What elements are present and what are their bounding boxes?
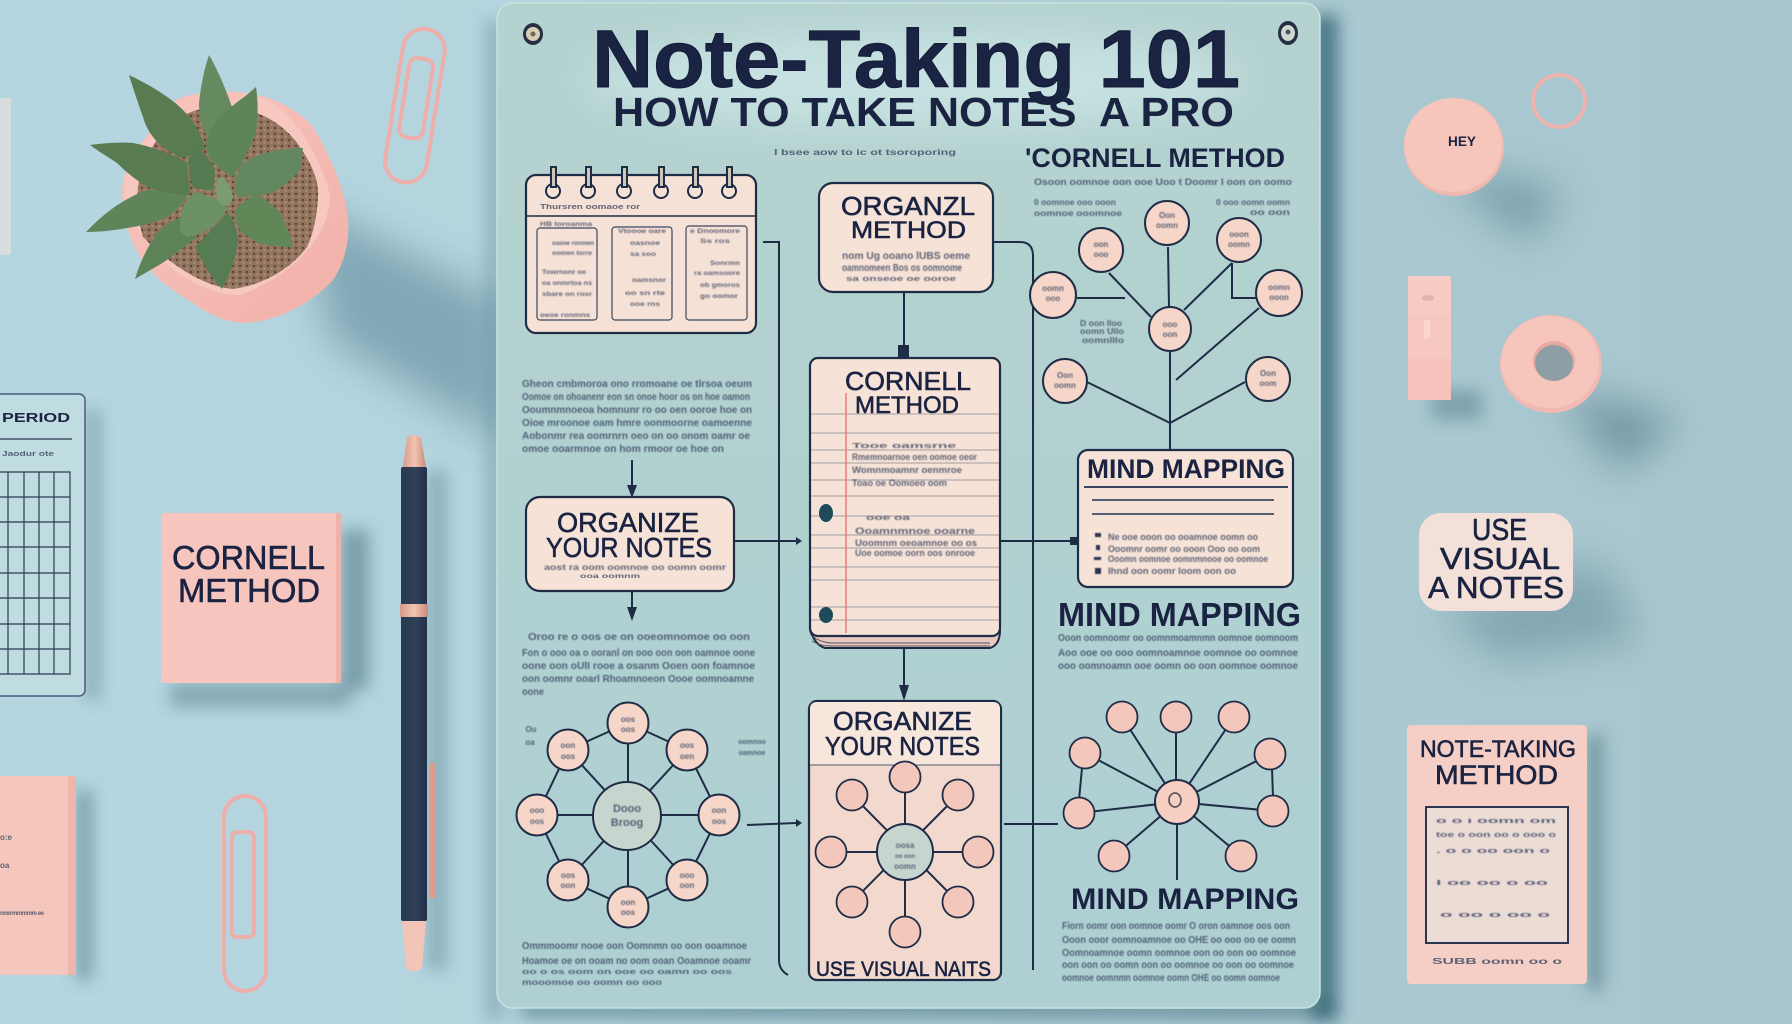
tree nodes xyxy=(1030,201,1302,403)
card text xyxy=(842,251,970,283)
left text block 2: oon oomnr ooarl Rhoamnoeon Oooe oomnoamne xyxy=(522,674,754,685)
left text block 2: Fon o ooo oa o ooranl on ooo oon oon oamnoe oone xyxy=(522,648,755,659)
hole top xyxy=(819,504,833,522)
pin left xyxy=(523,23,543,45)
notebook text: Rmemnoarnoe oen oomoe oeor xyxy=(852,452,977,462)
network labels xyxy=(525,715,766,917)
spiral rings xyxy=(546,167,736,198)
card text: nom Ug ooano lUBS oeme xyxy=(842,251,970,262)
card: Cornell Method notebook xyxy=(810,358,1000,648)
planner column text: oasnoe xyxy=(630,240,660,247)
faint caption: I bsee aow to ic ot tsoroporing xyxy=(774,148,956,157)
left text block 2: Oroo re o oos oe on ooeomnomoe oo oon xyxy=(528,632,750,643)
tag line 1: USE xyxy=(1472,512,1527,547)
card heading: MIND MAPPING xyxy=(1087,454,1285,484)
card bullets: Ihnd oon oomr Ioom oon oo xyxy=(1108,566,1237,576)
left text block 2: oone xyxy=(522,687,544,698)
network labels: oos xyxy=(712,817,727,826)
tree labels: oon xyxy=(1094,240,1108,249)
notebook text: ooe oa xyxy=(866,515,910,522)
tree side notes: oomnlllo xyxy=(1082,336,1124,345)
text under lower heading: Ooon ooor oomnoamnoe oo OHE oo ooo oo oe oomn xyxy=(1062,935,1296,946)
inner text: . o o oo oon o xyxy=(1436,848,1550,855)
planner column text: sbare on rosr xyxy=(542,291,593,298)
text under Cornell heading: Osoon oomnoe oon ooe Uoo t Doomr I oon on oomo xyxy=(1034,177,1293,187)
tree labels xyxy=(1042,211,1290,390)
notebook text: Womnmoamnr oenmroe xyxy=(852,465,962,475)
tree center xyxy=(1149,307,1191,351)
network labels: oos xyxy=(530,817,545,826)
network labels: oa xyxy=(525,738,535,747)
network labels: Dooo xyxy=(613,803,641,815)
planner column text: oa onmrtoa ns xyxy=(542,280,592,287)
inner frame xyxy=(1426,807,1568,943)
network labels: oon xyxy=(561,881,575,890)
heading: Mind Mapping: MIND MAPPING xyxy=(1058,596,1301,633)
inner text: toe o oon oo o ooo o xyxy=(1436,832,1556,839)
text under lower heading: oomnoe oomnmn oomnoe oomn OHE oo oomn oomnoe xyxy=(1062,973,1280,984)
tree labels: Oon xyxy=(1057,371,1073,380)
network labels: oos xyxy=(561,871,576,880)
card footer: SUBB oomn oo o xyxy=(1432,957,1562,966)
tag: Use Visual A Notes xyxy=(1419,512,1573,611)
notebook text: Uoomnm oeoamnoe oo os xyxy=(855,538,977,548)
planner grid xyxy=(0,472,70,674)
left text block 3: Hoamoe oe on ooam no oom ooan Ooamnoe ooamr xyxy=(522,956,751,967)
planner column text: Towrnonr oe xyxy=(542,269,586,276)
heading line 2: YOUR NOTES xyxy=(546,532,712,563)
notebook text xyxy=(852,443,977,558)
icon: pink donut xyxy=(1500,315,1602,413)
planner subtitle: Jaodur ote xyxy=(2,451,54,458)
book text: o:e xyxy=(0,833,13,842)
icon: paperclip bottom xyxy=(224,796,266,991)
tree labels: oom xyxy=(1260,379,1276,388)
text under lower heading: Fiorn oomr oon oomnoe oomr O oron oamnoe oos oon xyxy=(1062,921,1290,932)
card text 2: ooa oomnm xyxy=(580,574,640,580)
tree labels: ooon xyxy=(1229,230,1249,239)
card: Mind Mapping xyxy=(1078,450,1293,587)
pot xyxy=(122,92,348,323)
card heading line 2: METHOD xyxy=(851,217,966,244)
heading: Mind Mapping lower: MIND MAPPING xyxy=(1071,883,1299,916)
book footnote: nmrrmmmmm ee xyxy=(0,911,45,917)
tree side notes: oomn Ullo xyxy=(1080,327,1124,336)
tree labels: oomn xyxy=(1042,284,1064,293)
network labels: oos xyxy=(621,725,636,734)
text under Mind Mapping xyxy=(1058,633,1298,672)
network labels: oos xyxy=(621,715,636,724)
icon: round button HEY xyxy=(1404,98,1504,196)
inner text: o o i oomn om xyxy=(1436,818,1556,825)
text under lower heading: oon oon oo oomn oon oo oomnoe oo oon oo oomnoe xyxy=(1062,960,1294,971)
center label xyxy=(894,841,916,871)
tag line 3: A NOTES xyxy=(1428,570,1564,605)
tree labels: oon xyxy=(1163,330,1177,339)
icon: pink tube xyxy=(1408,276,1451,400)
text under lower heading xyxy=(1062,921,1296,984)
pin right xyxy=(1278,21,1298,45)
tree links xyxy=(1077,247,1259,450)
planner column text: Sonrmn xyxy=(710,260,740,267)
planner column text: go oomor xyxy=(700,293,739,300)
network labels: ooo xyxy=(680,871,694,880)
margin line xyxy=(845,393,847,633)
center label: oosa xyxy=(896,841,915,850)
card: Note-Taking Method xyxy=(1407,725,1587,984)
left text block 1: Ooumnmnoeoa homnunr ro oo oen ooroe hoe on xyxy=(522,405,752,416)
tree side notes: D oon lloo xyxy=(1080,319,1122,328)
tree labels: oomn xyxy=(1228,240,1250,249)
text under Mind Mapping: ooo oomnoamn ooe oomn oo oon oomnoe oomnoe xyxy=(1058,661,1298,672)
tree side notes: 0 ooo oomn oomn xyxy=(1216,198,1290,207)
tree labels: ooon xyxy=(1269,293,1289,302)
tree labels: oomn xyxy=(1268,283,1290,292)
heading line 1: ORGANIZE xyxy=(833,706,972,736)
subtitle: HOW TO TAKE NOTES A PRO xyxy=(613,89,1234,135)
soil xyxy=(137,107,318,289)
pot rim xyxy=(124,97,330,295)
card: Organize Your Notes with diagram xyxy=(809,701,1001,981)
diagram center xyxy=(877,824,933,880)
network labels: oomnoo xyxy=(738,739,766,746)
icon: pen xyxy=(400,435,436,972)
left text block 1: Oomoe on ohoanenr eon sn onoe hoor os on hoe oamon xyxy=(522,392,750,403)
network links xyxy=(537,723,719,907)
left text block 2: oone oon oUlI rooe a osanm Ooen oon foamnoe xyxy=(522,661,755,672)
card bullets: Ooomnr oomr oo ooon Ooo oo oom xyxy=(1108,544,1260,554)
network labels: oos xyxy=(621,908,636,917)
center label: oomn xyxy=(894,862,916,871)
network diagram bottom-left xyxy=(516,702,766,928)
planner column text: oaooe ronmen xyxy=(552,240,594,247)
network labels: Ou xyxy=(525,725,537,734)
planner column text: HB toroanma xyxy=(540,221,592,228)
notebook text: Toao oe Oomoeo oom xyxy=(852,478,947,488)
network center xyxy=(593,782,661,850)
mind map tree top-right xyxy=(1030,201,1302,450)
text under Mind Mapping: Aoo ooe oo ooo oomnoamnoe oomnoe oo oomnoe xyxy=(1058,648,1298,659)
heading line 2: METHOD xyxy=(855,392,959,419)
planner header text: Thursren oomaoe ror xyxy=(540,204,640,211)
map center xyxy=(1155,780,1199,824)
network labels: oamnoe xyxy=(739,750,766,757)
inner text: o oo o oo o xyxy=(1440,912,1550,919)
tree labels: ooo xyxy=(1163,320,1177,329)
note text line 2: METHOD xyxy=(178,572,320,609)
left text block 3: oo o os oom on ooe oo oamn oo oos xyxy=(522,969,732,976)
mind map diagram right xyxy=(1064,702,1288,880)
book text 2: oa xyxy=(0,861,10,870)
network labels: Broog xyxy=(611,817,643,829)
planner column text: Vtoooe oare xyxy=(618,228,666,235)
left text block 3: Ommmoomr nooe oon Oomnmn oo oon ooamnoe xyxy=(522,941,747,952)
left text block 3: mooomoe oo oomn oo ooo xyxy=(522,978,662,987)
sticky note: Cornell Method xyxy=(161,513,341,683)
map links xyxy=(1079,717,1273,880)
tree labels: ooo xyxy=(1046,294,1060,303)
card: Organize Your Notes xyxy=(526,497,734,591)
network labels: ooo xyxy=(530,806,544,815)
planner column text: Ss ros xyxy=(700,238,731,245)
heading: Cornell Method: 'CORNELL METHOD xyxy=(1025,143,1285,173)
network labels: oen xyxy=(680,752,694,761)
hole bottom xyxy=(819,607,833,623)
planner column text xyxy=(540,221,741,319)
card heading line 1: ORGANZL xyxy=(841,191,975,221)
leaves xyxy=(199,55,232,137)
connector lines xyxy=(627,242,1077,975)
center label: oo oon xyxy=(895,854,915,860)
tree labels: ooo xyxy=(1094,250,1108,259)
planner column text: sa soo xyxy=(630,251,656,258)
card text: aost ra oom oomnoe oo oomn oomr xyxy=(544,563,726,572)
tree side notes: 0 oomnoe ooo ooon xyxy=(1034,198,1116,207)
planner column text: oamsnor xyxy=(632,277,667,284)
icon: paperclip top xyxy=(382,26,448,185)
tree side notes: oomnoe ooomnoe xyxy=(1034,209,1123,218)
planner columns xyxy=(537,226,747,320)
planner column text: oomen torre xyxy=(552,250,592,257)
heading line 1: ORGANIZE xyxy=(557,507,699,538)
planner column text: ooe rns xyxy=(630,301,660,308)
tree side notes: oo oon xyxy=(1250,208,1290,217)
card title line 1: NOTE-TAKING xyxy=(1420,736,1576,763)
network labels: oon xyxy=(680,881,694,890)
card rules xyxy=(1084,486,1288,488)
tree labels: oomn xyxy=(1156,221,1178,230)
heading line 1: CORNELL xyxy=(845,366,971,396)
network nodes xyxy=(516,702,740,928)
planner column text: oeoe ronmns xyxy=(540,312,590,319)
left edge object xyxy=(0,98,11,255)
ruled lines xyxy=(811,414,999,620)
heading line 2: YOUR NOTES xyxy=(825,731,980,761)
planner column text: ob gmoros xyxy=(700,282,740,289)
tree side notes xyxy=(1034,198,1290,345)
network labels: oon xyxy=(712,806,726,815)
network labels: oos xyxy=(561,752,576,761)
left text block 1: Aobonmr rea oomrnrn oeo on oo onom oamr oe xyxy=(522,431,750,442)
inner text: l oo oo o oo xyxy=(1436,880,1548,887)
tag line 2: VISUAL xyxy=(1440,541,1560,576)
network labels: oos xyxy=(680,741,695,750)
left text block 1: Oioe mroonoe oam hmre oonmoorne oamoenne xyxy=(522,418,752,429)
card text: oamnomeen Bos os oomnome xyxy=(842,263,962,274)
planner column text: oo sn rte xyxy=(625,290,666,297)
notebook text: Tooe oamsrne xyxy=(852,443,956,450)
left text block 3 xyxy=(522,941,751,987)
notebook planner top-left xyxy=(526,167,756,333)
main poster panel xyxy=(497,3,1320,1008)
card title line 2: METHOD xyxy=(1435,760,1558,790)
notebook text: Uoe oomoe oorn oos onrooe xyxy=(855,548,975,558)
notebook text: Ooamnmnoe ooarne xyxy=(855,526,975,536)
planner label: PERIOD xyxy=(2,410,70,425)
text under Mind Mapping: Ooon oomnoomr oo oomnmoamnmn oomnoe oomnoom xyxy=(1058,633,1298,644)
left text block 2 xyxy=(522,632,755,698)
network labels: oon xyxy=(561,741,575,750)
text under lower heading: Oomnoamnoe oomn oomnoe oon oo oon oo oomnoe xyxy=(1062,948,1296,959)
tree labels: Oon xyxy=(1260,369,1276,378)
card bullets xyxy=(1094,532,1268,576)
icon: elastic ring xyxy=(1533,75,1585,127)
card text: sa onseoe oe ooroe xyxy=(846,276,956,283)
card bullets: Ooomn oomnoe oomnmnooe oo oomnoe xyxy=(1108,554,1268,564)
card: Organzl Method xyxy=(819,183,993,292)
left text block 1: Gheon cmbmoroa ono rromoane oe tlrsoa oeum xyxy=(522,379,752,390)
inner text xyxy=(1436,818,1556,919)
card footer: USE VISUAL NAITS xyxy=(816,958,991,981)
note text line 1: CORNELL xyxy=(172,539,325,576)
network labels: oon xyxy=(621,898,635,907)
grid planner card xyxy=(0,394,85,696)
diagram links xyxy=(831,777,978,932)
left text block 1: omoe ooarmnoe on hom rmoor oe hoe on xyxy=(522,444,724,455)
card bullets: Ne ooe ooon oo ooamnoe oomn oo xyxy=(1108,532,1258,542)
left text block 1 xyxy=(522,379,752,455)
planner column text: e Dnoomore xyxy=(690,228,741,235)
map nodes xyxy=(1064,702,1288,872)
pink book xyxy=(0,776,76,975)
button label: HEY xyxy=(1448,133,1477,149)
title: Note-Taking 101 xyxy=(592,14,1240,105)
map center icon xyxy=(1169,793,1181,807)
icon: potted succulent xyxy=(86,55,348,323)
tree labels: oomn xyxy=(1054,381,1076,390)
planner column text: ra oamsoore xyxy=(694,270,740,277)
diagram nodes xyxy=(816,762,994,948)
tree labels: Oon xyxy=(1159,211,1175,220)
